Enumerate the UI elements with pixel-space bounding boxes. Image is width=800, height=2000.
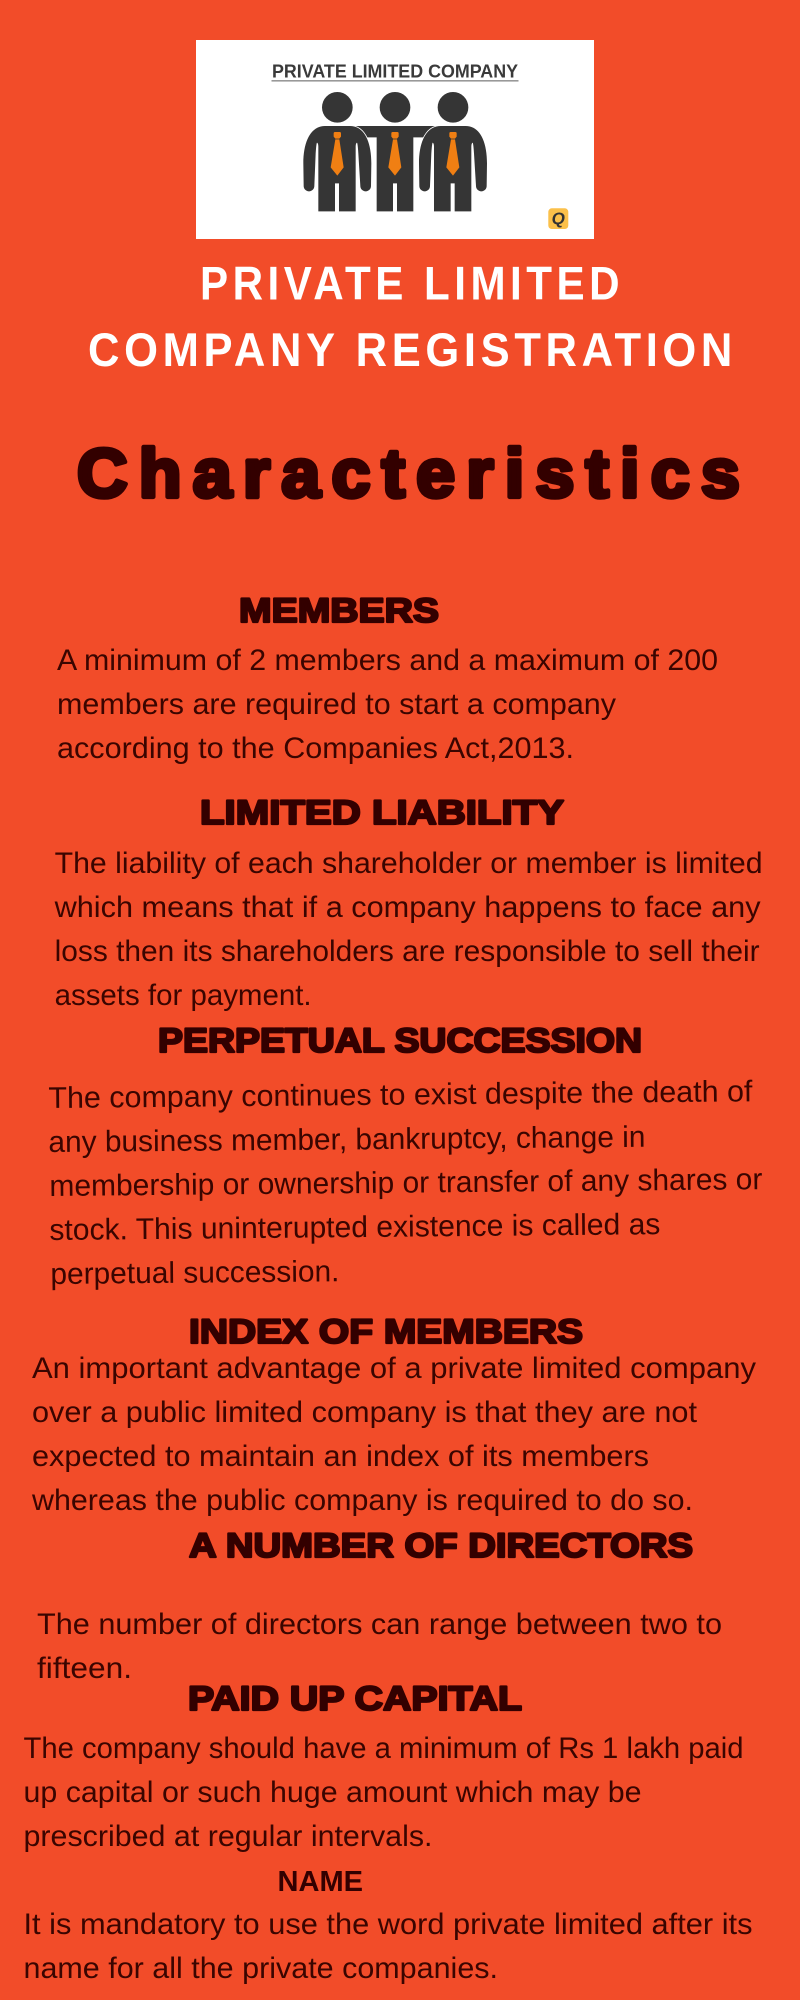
text: directors body bbox=[37, 1608, 722, 1685]
heading: limited liability: LIMITED LIABILITY bbox=[200, 794, 564, 832]
icon: Q badge bbox=[548, 208, 568, 229]
text: paid up capital body: The company should have a minimum of Rs 1 lakh paid bbox=[24, 1732, 744, 1765]
text: members body: according to the Companies Act,2013. bbox=[57, 732, 574, 765]
heading: paid up capital: PAID UP CAPITAL bbox=[188, 1680, 522, 1718]
heading: Characteristics: Characteristics bbox=[77, 435, 751, 512]
text: perpetual succession body: any business member, bankruptcy, change in bbox=[48, 1121, 646, 1159]
text: index of members body: An important advantage of a private limited company bbox=[32, 1352, 756, 1385]
panel: index of members bbox=[31, 1313, 756, 1517]
text: directors body: The number of directors can range between two to bbox=[37, 1608, 722, 1641]
text: directors body: fifteen. bbox=[37, 1652, 132, 1685]
text: members body bbox=[57, 644, 718, 765]
text: paid up capital body: prescribed at regular intervals. bbox=[24, 1820, 432, 1853]
panel: paid up capital bbox=[24, 1680, 744, 1853]
panel: perpetual succession bbox=[48, 1022, 763, 1291]
text: name body: It is mandatory to use the word private limited after its bbox=[24, 1908, 753, 1941]
panel: limited liability bbox=[54, 794, 763, 1012]
logo heading: PRIVATE LIMITED COMPANY bbox=[272, 61, 519, 82]
title bbox=[88, 256, 737, 376]
icon: three business people bbox=[303, 92, 487, 211]
heading: a number of directors: A NUMBER OF DIRECTORS bbox=[189, 1527, 693, 1565]
title: COMPANY REGISTRATION bbox=[88, 323, 737, 376]
text: limited liability body: assets for payment. bbox=[55, 979, 312, 1012]
text: limited liability body: The liability of each shareholder or member is limited bbox=[55, 847, 763, 880]
text: perpetual succession body bbox=[48, 1075, 763, 1291]
text: index of members body: over a public limited company is that they are not bbox=[32, 1396, 698, 1429]
heading: name: NAME bbox=[278, 1866, 363, 1898]
text: limited liability body bbox=[54, 847, 763, 1012]
icon: Q badge: Q bbox=[552, 209, 565, 228]
text: paid up capital body bbox=[24, 1732, 744, 1853]
text: paid up capital body: up capital or such huge amount which may be bbox=[24, 1776, 642, 1809]
title: PRIVATE LIMITED bbox=[200, 256, 624, 310]
text: perpetual succession body: stock. This uninterupted existence is called as bbox=[49, 1208, 661, 1247]
text: perpetual succession body: perpetual succession. bbox=[50, 1255, 340, 1291]
text: index of members body: expected to maintain an index of its members bbox=[32, 1440, 649, 1473]
panel: a number of directors bbox=[37, 1527, 722, 1685]
text: index of members body: whereas the public company is required to do so. bbox=[31, 1484, 693, 1517]
panel: members bbox=[57, 592, 718, 765]
text: members body: members are required to start a company bbox=[57, 688, 616, 721]
text: members body: A minimum of 2 members and a maximum of 200 bbox=[57, 644, 718, 677]
panel: name bbox=[24, 1866, 753, 1985]
text: perpetual succession body: The company continues to exist despite the death of bbox=[48, 1075, 753, 1115]
text: limited liability body: which means that if a company happens to face any bbox=[54, 891, 761, 924]
text: index of members body bbox=[31, 1352, 756, 1517]
heading: perpetual succession: PERPETUAL SUCCESSION bbox=[158, 1022, 642, 1060]
text: perpetual succession body: membership or ownership or transfer of any shares or bbox=[49, 1163, 763, 1203]
text: limited liability body: loss then its shareholders are responsible to sell their bbox=[55, 935, 760, 968]
heading: index of members: INDEX OF MEMBERS bbox=[189, 1313, 583, 1351]
text: name body bbox=[24, 1908, 753, 1985]
text: name body: name for all the private companies. bbox=[24, 1952, 498, 1985]
heading: members: MEMBERS bbox=[239, 592, 439, 630]
panel: logo card bbox=[196, 40, 594, 239]
